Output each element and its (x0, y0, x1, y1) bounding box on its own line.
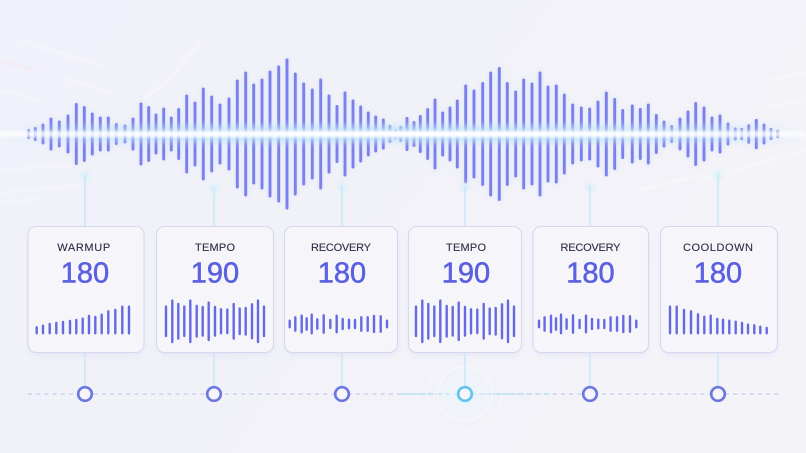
decorative light rays (0, 40, 806, 203)
value: 190: 190 (442, 258, 490, 290)
panel: recovery 2 (533, 226, 648, 352)
label: tempo: TEMPO (195, 242, 235, 254)
mini chart: tempo (416, 301, 514, 342)
panel: tempo 2 (408, 226, 522, 352)
value: 180: 180 (61, 258, 109, 290)
highlighted node halo (427, 356, 503, 432)
timeline dashed line (28, 393, 780, 395)
waveform glow (29, 60, 778, 208)
value: 190: 190 (191, 258, 239, 290)
value: 180: 180 (566, 258, 615, 290)
panel: cooldown (660, 226, 778, 352)
label: recovery: RECOVERY (311, 242, 372, 254)
lower connector lines (85, 352, 718, 387)
upper connector lines (81, 171, 722, 227)
card shadows (29, 232, 777, 355)
panel: recovery 1 (284, 226, 398, 352)
label: warmup: WARMUP (57, 242, 110, 254)
central glow line (0, 126, 806, 142)
main waveform (0, 60, 806, 208)
timeline nodes (78, 387, 725, 401)
mini chart: warmup (37, 307, 129, 333)
label: tempo: TEMPO (446, 242, 486, 254)
panel: tempo 1 (156, 226, 274, 352)
panel: warmup (28, 226, 144, 352)
mini chart: cooldown (670, 307, 767, 333)
mini chart: recovery (539, 315, 636, 333)
value: 180: 180 (694, 258, 742, 290)
waveform bars (29, 60, 778, 208)
mini chart: tempo (166, 301, 264, 342)
value: 180: 180 (318, 258, 366, 290)
mini chart: recovery (290, 315, 387, 333)
label: recovery: RECOVERY (560, 242, 621, 254)
label: cooldown: COOLDOWN (683, 242, 753, 254)
